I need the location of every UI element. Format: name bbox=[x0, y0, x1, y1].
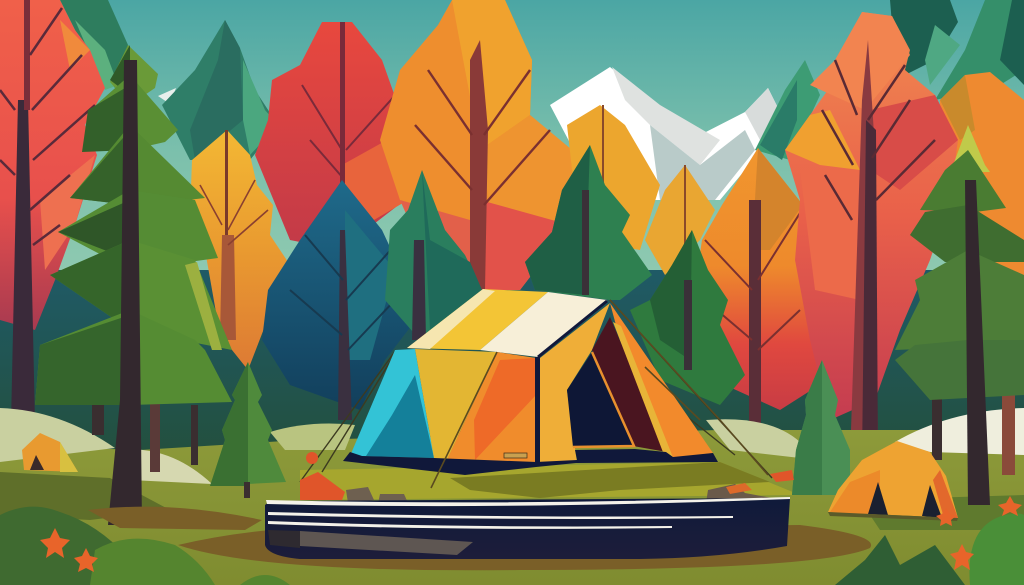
distant thin trunks bbox=[92, 390, 1015, 475]
tree: tall right orange-red bbox=[785, 12, 958, 460]
platform stripes bbox=[266, 497, 790, 529]
tree: tall orange bbox=[380, 0, 578, 290]
rocks and flowers by tent bbox=[300, 452, 794, 504]
flowers right bbox=[936, 496, 1022, 570]
sky bbox=[0, 0, 1024, 440]
tent label bbox=[504, 453, 527, 458]
tree: green right of tent bbox=[630, 230, 745, 405]
tent shadow bbox=[450, 462, 770, 498]
dirt path around platform bbox=[88, 507, 871, 570]
tent guy lines bbox=[431, 300, 768, 488]
tent base trim bbox=[343, 449, 718, 475]
ground meadow bbox=[0, 430, 1024, 585]
foreground grass right bbox=[835, 514, 1024, 585]
small tent left bbox=[22, 433, 78, 472]
dark forest backdrop bbox=[0, 270, 1024, 450]
tree: red maple bbox=[255, 22, 408, 250]
tent side panels bbox=[350, 349, 536, 462]
tree: green centre bbox=[525, 145, 652, 300]
tree: orange centre-right bbox=[690, 148, 845, 460]
large pine right bbox=[895, 125, 1024, 505]
main tent bbox=[343, 289, 768, 488]
tree: left red bbox=[0, 0, 105, 470]
platform bbox=[265, 497, 790, 559]
background hills bbox=[0, 408, 1024, 484]
small pine left bbox=[210, 362, 286, 498]
tree: green behind tent left bbox=[385, 170, 482, 340]
tree: orange far right bbox=[940, 72, 1024, 340]
tree: yellow left bbox=[190, 130, 290, 370]
flowers left bbox=[40, 528, 98, 572]
small tent right bbox=[828, 441, 958, 521]
platform smudge bbox=[268, 530, 473, 555]
snowy mountain bbox=[158, 64, 778, 200]
tent pole and eave bbox=[535, 301, 607, 465]
back green conifers bbox=[60, 0, 1024, 160]
small pine right bbox=[792, 360, 850, 495]
tree: blue centre-left bbox=[262, 180, 412, 420]
large pine left bbox=[35, 45, 232, 525]
foreground bushes left bbox=[0, 507, 290, 585]
tent roof bbox=[407, 289, 607, 357]
guy lines back bbox=[300, 300, 772, 482]
tree: yellow behind tent bbox=[567, 105, 715, 275]
tent front bbox=[540, 303, 713, 464]
